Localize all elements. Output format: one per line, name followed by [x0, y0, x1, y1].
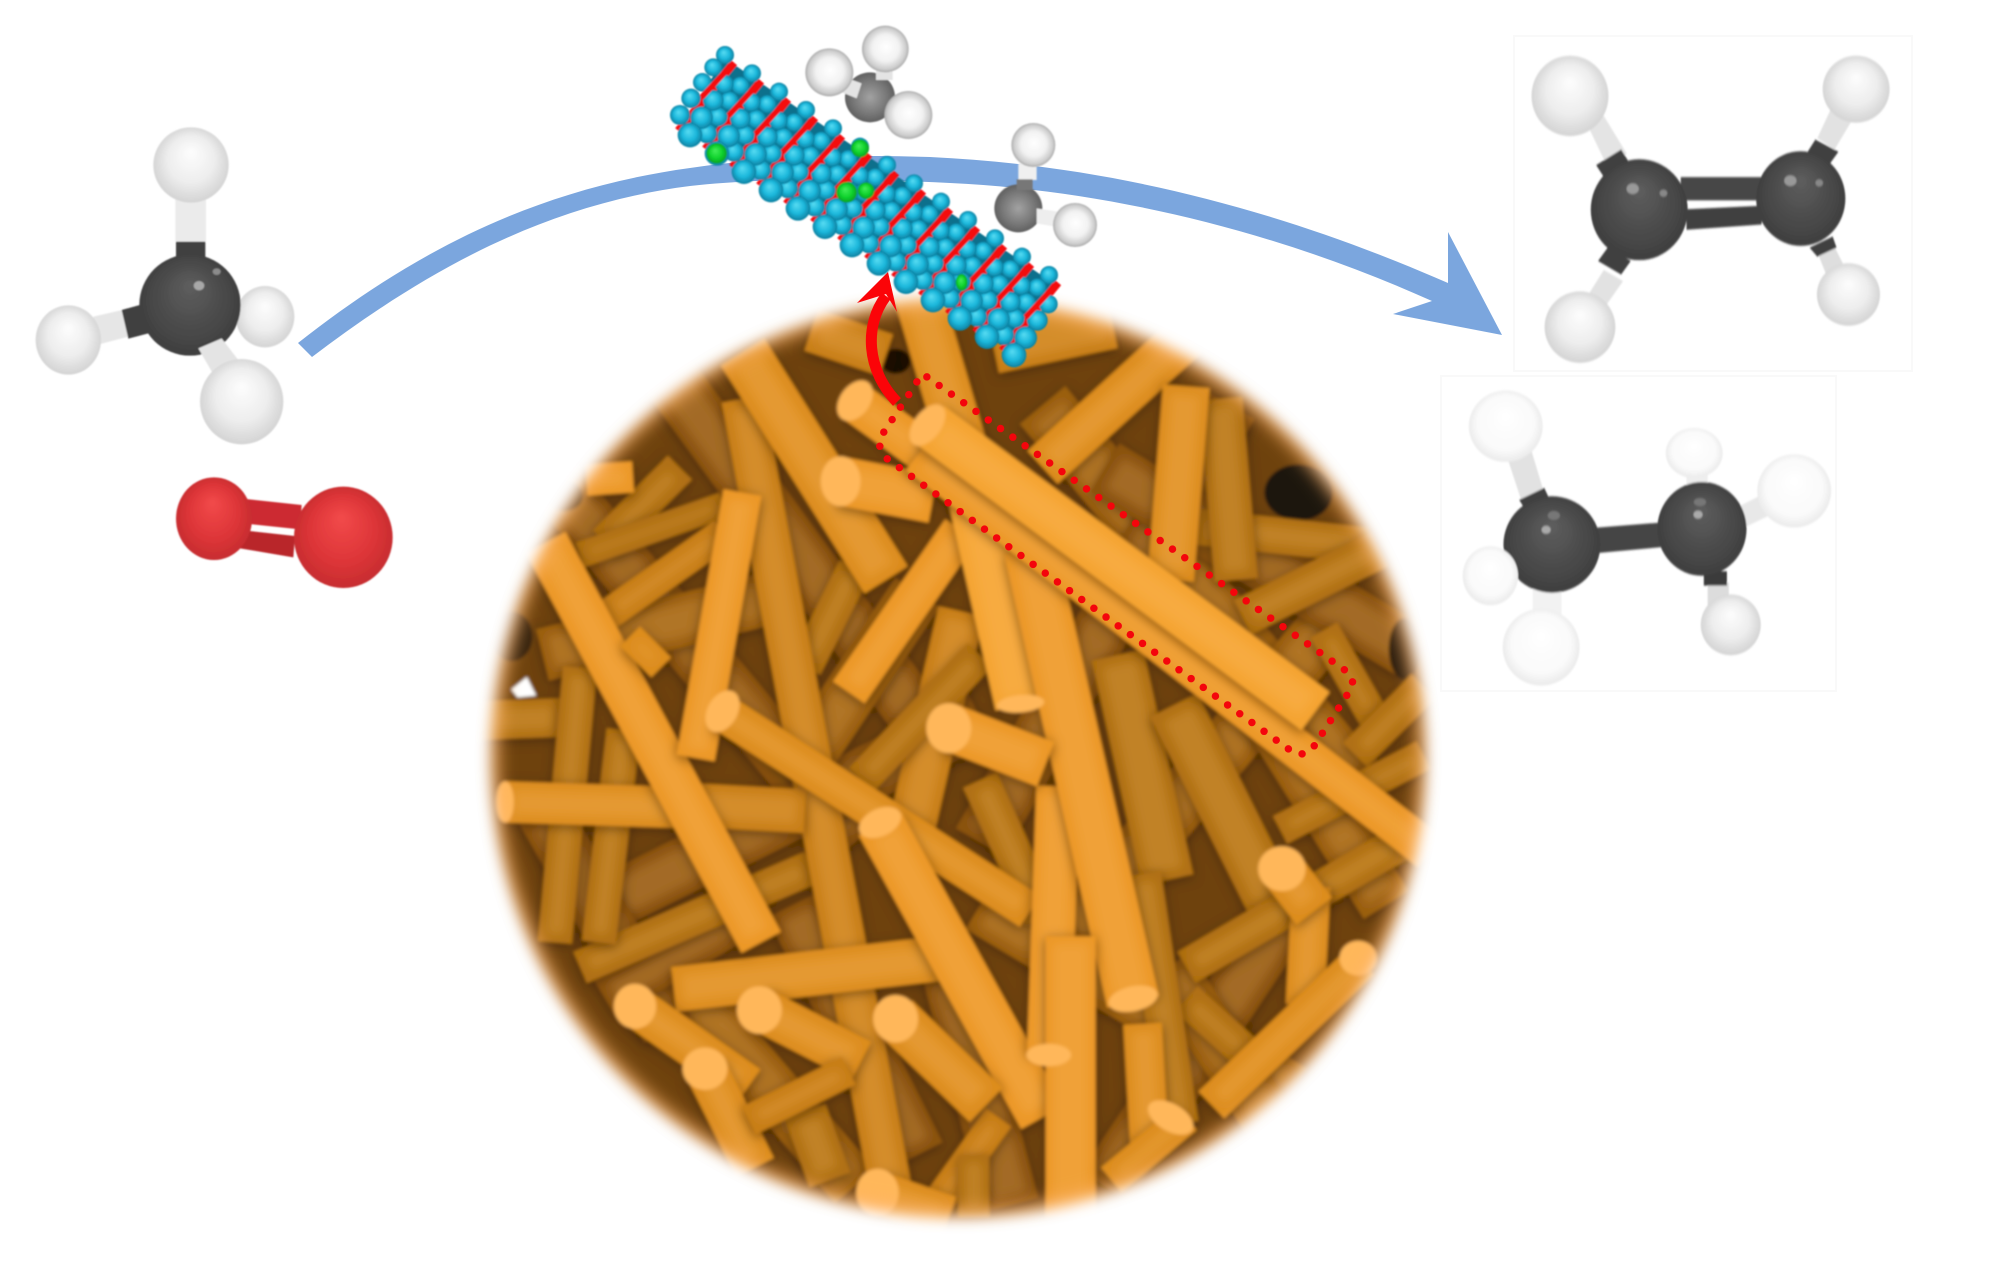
C=C double bond [1681, 177, 1762, 230]
bond: upper-left hydrogen [1588, 116, 1631, 183]
center rods [841, 402, 1133, 1218]
hydrogen: right [1757, 454, 1831, 528]
dotted-box rods [918, 425, 1430, 852]
bond: right hydrogen [1738, 493, 1769, 527]
hydrogen: lower-right [1817, 263, 1880, 326]
oxygen atom: left [176, 477, 252, 560]
nanorod atomic lattice [670, 46, 1058, 367]
masked rod field [481, 292, 1436, 1226]
bond: top [175, 197, 206, 265]
rod end caps [496, 374, 1377, 1216]
oxygen atom: right [294, 487, 393, 588]
carbon [994, 184, 1042, 232]
hydrogen: lower front [200, 359, 283, 444]
bond: bottom hydrogen [1533, 585, 1562, 616]
ethylene molecule [1532, 56, 1890, 363]
hydrogen: lower right [1701, 595, 1761, 655]
blue reaction arrow [298, 156, 1502, 357]
hydrogen: top left [1469, 391, 1543, 462]
bond: upper-left hydrogen [1506, 449, 1552, 516]
carbon: left [1591, 159, 1688, 260]
bond: back hydrogen [1687, 469, 1708, 486]
filler rods, deepest layer [542, 374, 1418, 1205]
carbon: left [1503, 496, 1600, 593]
hydrogen: lower right [884, 91, 932, 139]
bond: lower [198, 338, 243, 380]
C-C single bond [1592, 522, 1665, 553]
bond: left [93, 304, 148, 345]
front left rods [546, 492, 1030, 942]
lower left rods [633, 1005, 986, 1218]
bond: lower-left hydrogen [1494, 567, 1519, 591]
carbon atom [139, 254, 241, 356]
faint frame: ethylene image [1514, 36, 1912, 371]
green active-site atoms [706, 139, 968, 291]
red dotted selection box [880, 376, 1353, 754]
red curved arrow [857, 272, 897, 402]
dark bond stub [1017, 179, 1033, 190]
methylene fragment molecule [994, 123, 1097, 247]
hydrogen: upper-left [1532, 56, 1608, 136]
bond to right hydrogen [1037, 208, 1058, 227]
hydrogen: upper-right [1823, 56, 1890, 123]
carbon: right [1756, 151, 1845, 246]
hydrogen: left [36, 305, 101, 375]
red plane accents over atoms [702, 63, 1058, 317]
bond: upper-right hydrogen [1808, 109, 1852, 165]
hydrogen: bottom [1503, 609, 1580, 686]
hydrogen: top [1011, 123, 1055, 167]
cyan lattice atoms [670, 46, 1058, 367]
bond: lower-right hydrogen [1704, 571, 1729, 609]
carbon: right [1657, 482, 1747, 576]
upper double bond [240, 498, 302, 529]
lattice underlay [682, 58, 1053, 355]
hydrogen: lower left [1463, 546, 1518, 605]
lower right rods [1111, 871, 1361, 1180]
orange halo [492, 301, 1424, 1216]
white speck [511, 677, 536, 698]
hydrogen: right [1053, 203, 1097, 247]
methyl radical molecule [805, 26, 932, 139]
nanorod disc: SEM micrograph [468, 268, 1468, 1268]
red lattice planes [678, 63, 1058, 351]
backdrop [481, 293, 1436, 1226]
hydrogen: back right [236, 286, 294, 347]
oxygen molecule [176, 477, 393, 588]
hydrogen: left [805, 48, 853, 96]
bond: lower-right hydrogen [1810, 237, 1846, 281]
hydrogen: top back [1666, 428, 1723, 478]
dark gaps [490, 349, 1421, 680]
bond: lower-left hydrogen [1588, 248, 1631, 306]
ethane molecule [1463, 391, 1831, 686]
carbon [845, 72, 895, 122]
hydrogen: top [153, 127, 229, 203]
hydrogen: top [862, 26, 909, 72]
bond to top hydrogen [876, 57, 893, 80]
back layer rods [474, 399, 1424, 1218]
long rods [505, 352, 942, 1199]
lower double bond [240, 530, 295, 557]
methane molecule [36, 127, 294, 444]
top rods behind nanorod [811, 292, 1186, 580]
hydrogen: lower-left [1545, 291, 1615, 363]
faint frame: ethane image [1441, 376, 1836, 691]
bond to left hydrogen [840, 77, 862, 98]
bond to top hydrogen [1018, 163, 1037, 180]
